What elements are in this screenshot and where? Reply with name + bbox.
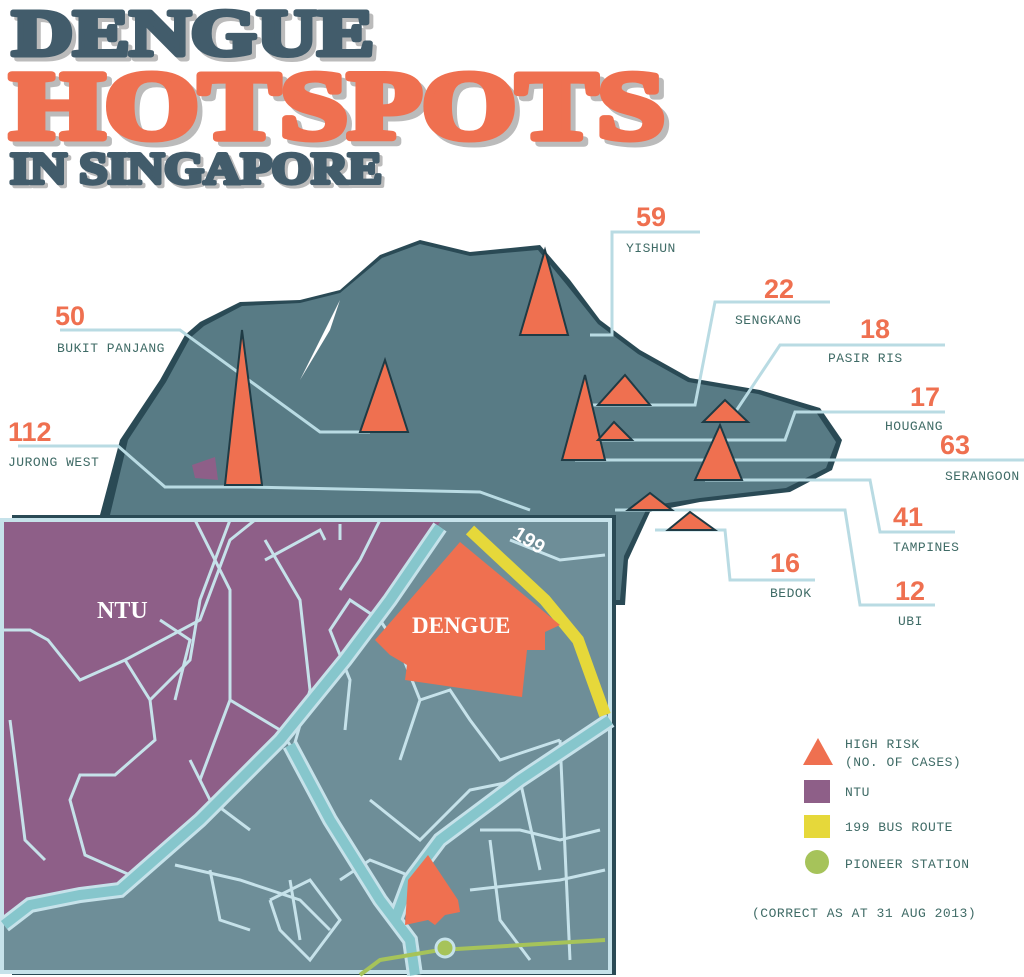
labels: SENGKANG	[735, 313, 801, 328]
title: HOTSPOTS	[15, 57, 670, 164]
labels	[8, 202, 1020, 629]
minor streets	[4, 520, 605, 960]
bus route 199: 199	[509, 523, 549, 559]
title: DENGUE	[16, 1, 378, 74]
legend	[752, 737, 976, 921]
NTU area	[4, 522, 440, 915]
labels: 63	[940, 430, 970, 460]
street map inset	[2, 515, 616, 975]
labels: SERANGOON	[945, 469, 1020, 484]
labels: BEDOK	[770, 586, 812, 601]
labels: UBI	[898, 614, 923, 629]
legend: HIGH RISK	[845, 737, 920, 752]
legend: (CORRECT AS AT 31 AUG 2013)	[752, 906, 976, 921]
main roads	[4, 527, 610, 975]
labels: 16	[770, 548, 800, 578]
leader lines	[18, 232, 1024, 605]
bus route 199	[470, 523, 605, 715]
pioneer station line	[360, 939, 605, 975]
title: HOTSPOTS	[10, 52, 665, 159]
labels: 41	[893, 502, 923, 532]
legend: PIONEER STATION	[845, 857, 970, 872]
peaks	[225, 250, 748, 530]
labels: YISHUN	[626, 241, 676, 256]
dengue zone	[375, 542, 560, 697]
labels: PASIR RIS	[828, 351, 903, 366]
labels: JURONG WEST	[8, 455, 99, 470]
legend: (NO. OF CASES)	[845, 755, 961, 770]
legend: NTU	[845, 785, 870, 800]
island map	[18, 232, 1024, 605]
labels: 59	[636, 202, 666, 232]
labels: 22	[764, 274, 794, 304]
legend: 199 BUS ROUTE	[845, 820, 953, 835]
title: IN SINGAPORE	[10, 144, 382, 193]
labels: 50	[55, 301, 85, 331]
dengue zone: DENGUE	[412, 613, 510, 638]
labels: 18	[860, 314, 890, 344]
title	[10, 0, 670, 196]
labels: 112	[8, 417, 52, 447]
labels: BUKIT PANJANG	[57, 341, 165, 356]
title: IN SINGAPORE	[13, 147, 385, 196]
labels: HOUGANG	[885, 419, 943, 434]
labels: 12	[895, 576, 925, 606]
NTU label: NTU	[97, 598, 148, 624]
labels: TAMPINES	[893, 540, 959, 555]
labels: 17	[910, 382, 940, 412]
